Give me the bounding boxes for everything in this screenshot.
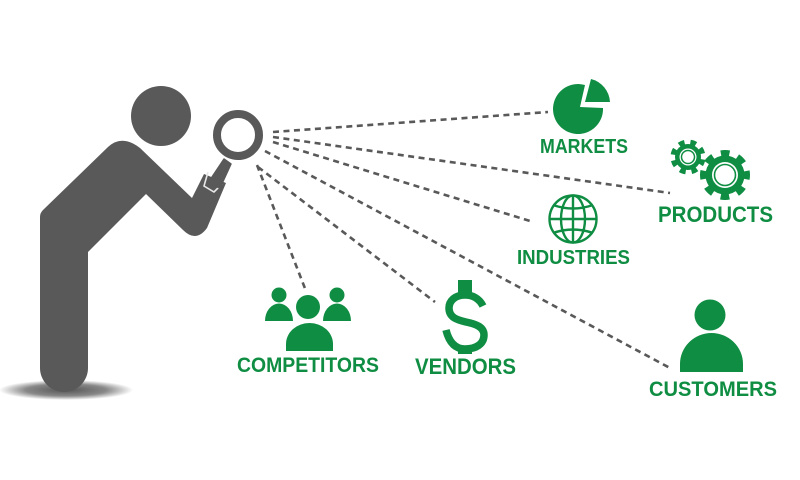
icon: vendors dollar sign [446,280,484,354]
ground shadow [0,380,133,400]
icon: products gears [669,138,747,197]
label: vendors: VENDORS [415,354,516,379]
magnifier lens [217,114,259,156]
label: competitors: COMPETITORS [237,354,379,377]
icon: customers person [680,300,743,372]
label: industries: INDUSTRIES [517,247,630,269]
icon: markets pie chart [553,79,610,134]
figure with magnifying glass [40,86,259,392]
hand outline [204,172,222,192]
label: customers: CUSTOMERS [649,378,777,401]
label: markets: MARKETS [540,136,628,158]
icon: competitors group [265,288,351,351]
small gear [669,138,707,176]
head [131,86,191,146]
dashed sight lines [257,112,670,368]
icon: industries globe [550,196,596,242]
label: products: PRODUCTS [658,202,773,227]
magnifier handle [208,159,231,188]
large gear [703,153,747,197]
body [40,141,226,392]
